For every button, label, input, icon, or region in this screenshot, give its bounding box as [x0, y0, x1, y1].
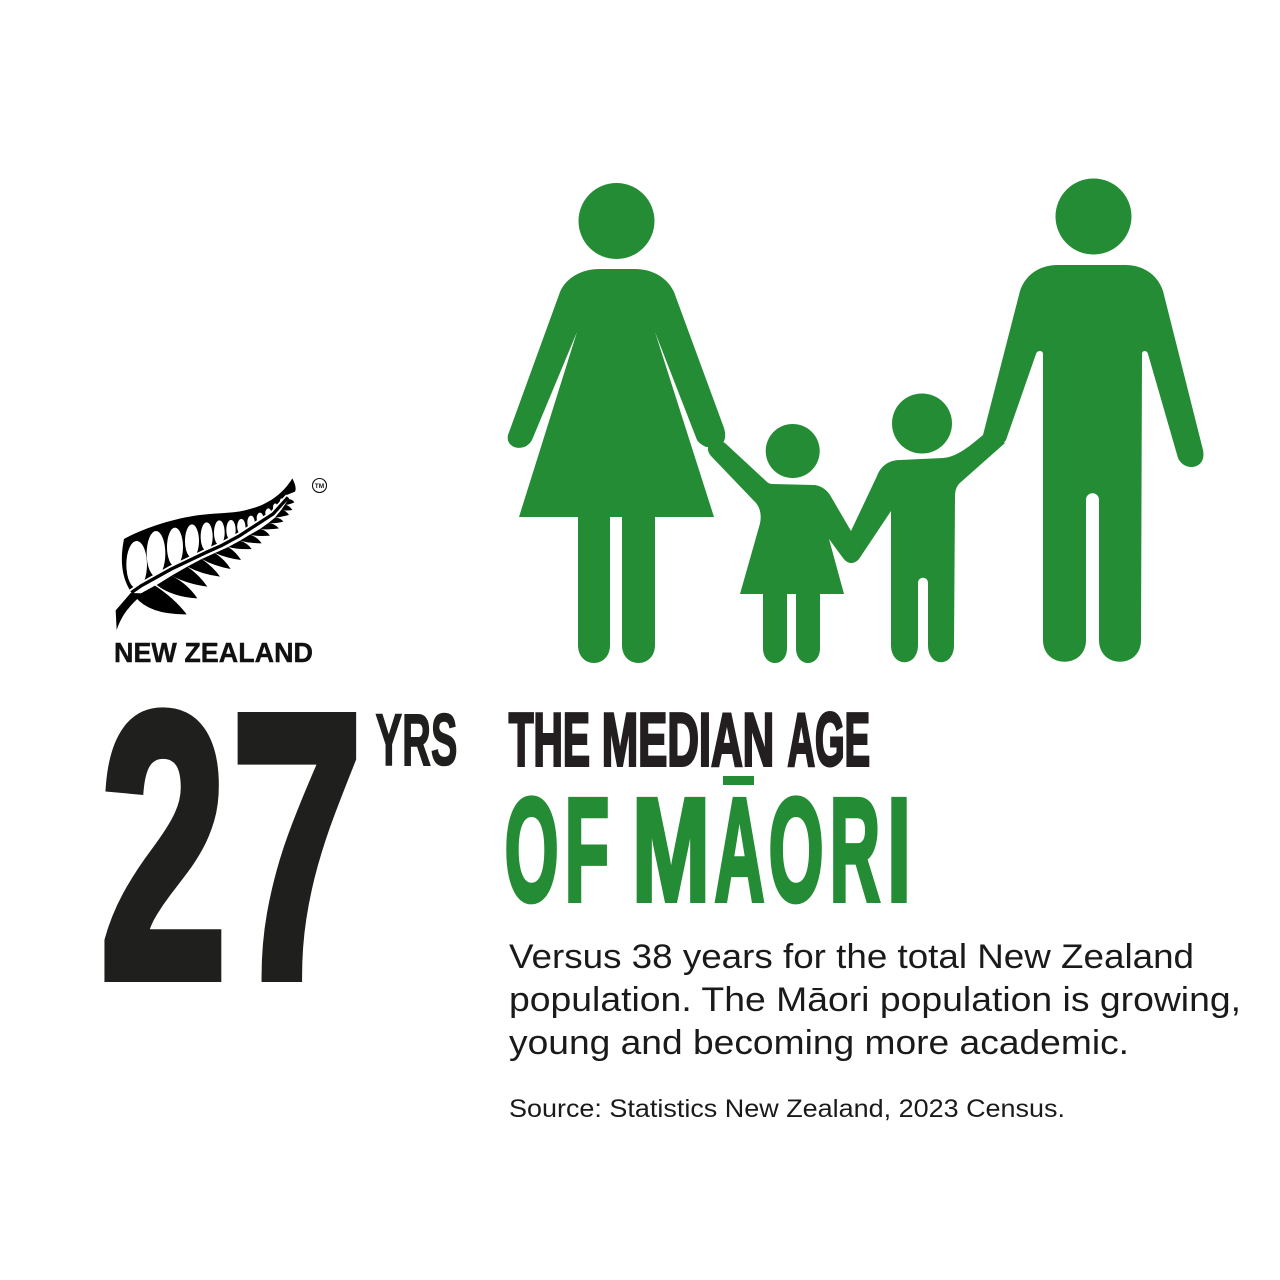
- heading: of Māori: [505, 768, 911, 932]
- logo wordmark: NEW ZEALAND: [114, 637, 313, 668]
- icon: trademark symbol: [312, 478, 326, 492]
- heading: the median age: AGE: [788, 698, 870, 782]
- source note: Source: Statistics New Zealand, 2023 Census.: [509, 1095, 1065, 1123]
- body text: young and becoming more academic.: [509, 1024, 1129, 1062]
- body text: population. The Māori population is growing,: [509, 981, 1241, 1019]
- unit: YRS: YRS: [376, 699, 458, 781]
- big number: 27: 7: [230, 636, 364, 1058]
- heading: of Māori: R: [830, 768, 880, 932]
- heading: of Māori: I: [887, 768, 911, 932]
- family illustration: [508, 178, 1203, 663]
- big number: 27: 2: [100, 635, 228, 1058]
- heading: of Māori: F: [565, 768, 609, 932]
- icon: girl: [708, 424, 851, 663]
- heading: of Māori: O: [769, 768, 824, 932]
- heading: the median age: THE: [509, 698, 590, 782]
- heading: the median age: MEDIAN: [602, 698, 774, 782]
- body text: Versus 38 years for the total New Zealand: [509, 938, 1194, 976]
- logo: New Zealand fern: [114, 478, 326, 668]
- icon: silver fern: [116, 478, 296, 630]
- heading: of Māori: Ā: [714, 768, 764, 932]
- heading: of Māori: M: [632, 768, 710, 932]
- icon: woman: [508, 183, 725, 663]
- heading: of Māori: O: [505, 768, 559, 932]
- icon: trademark symbol: TM: [315, 483, 324, 490]
- body text: [509, 938, 1241, 1062]
- icon: boy: [829, 394, 1005, 662]
- icon: man: [983, 178, 1203, 662]
